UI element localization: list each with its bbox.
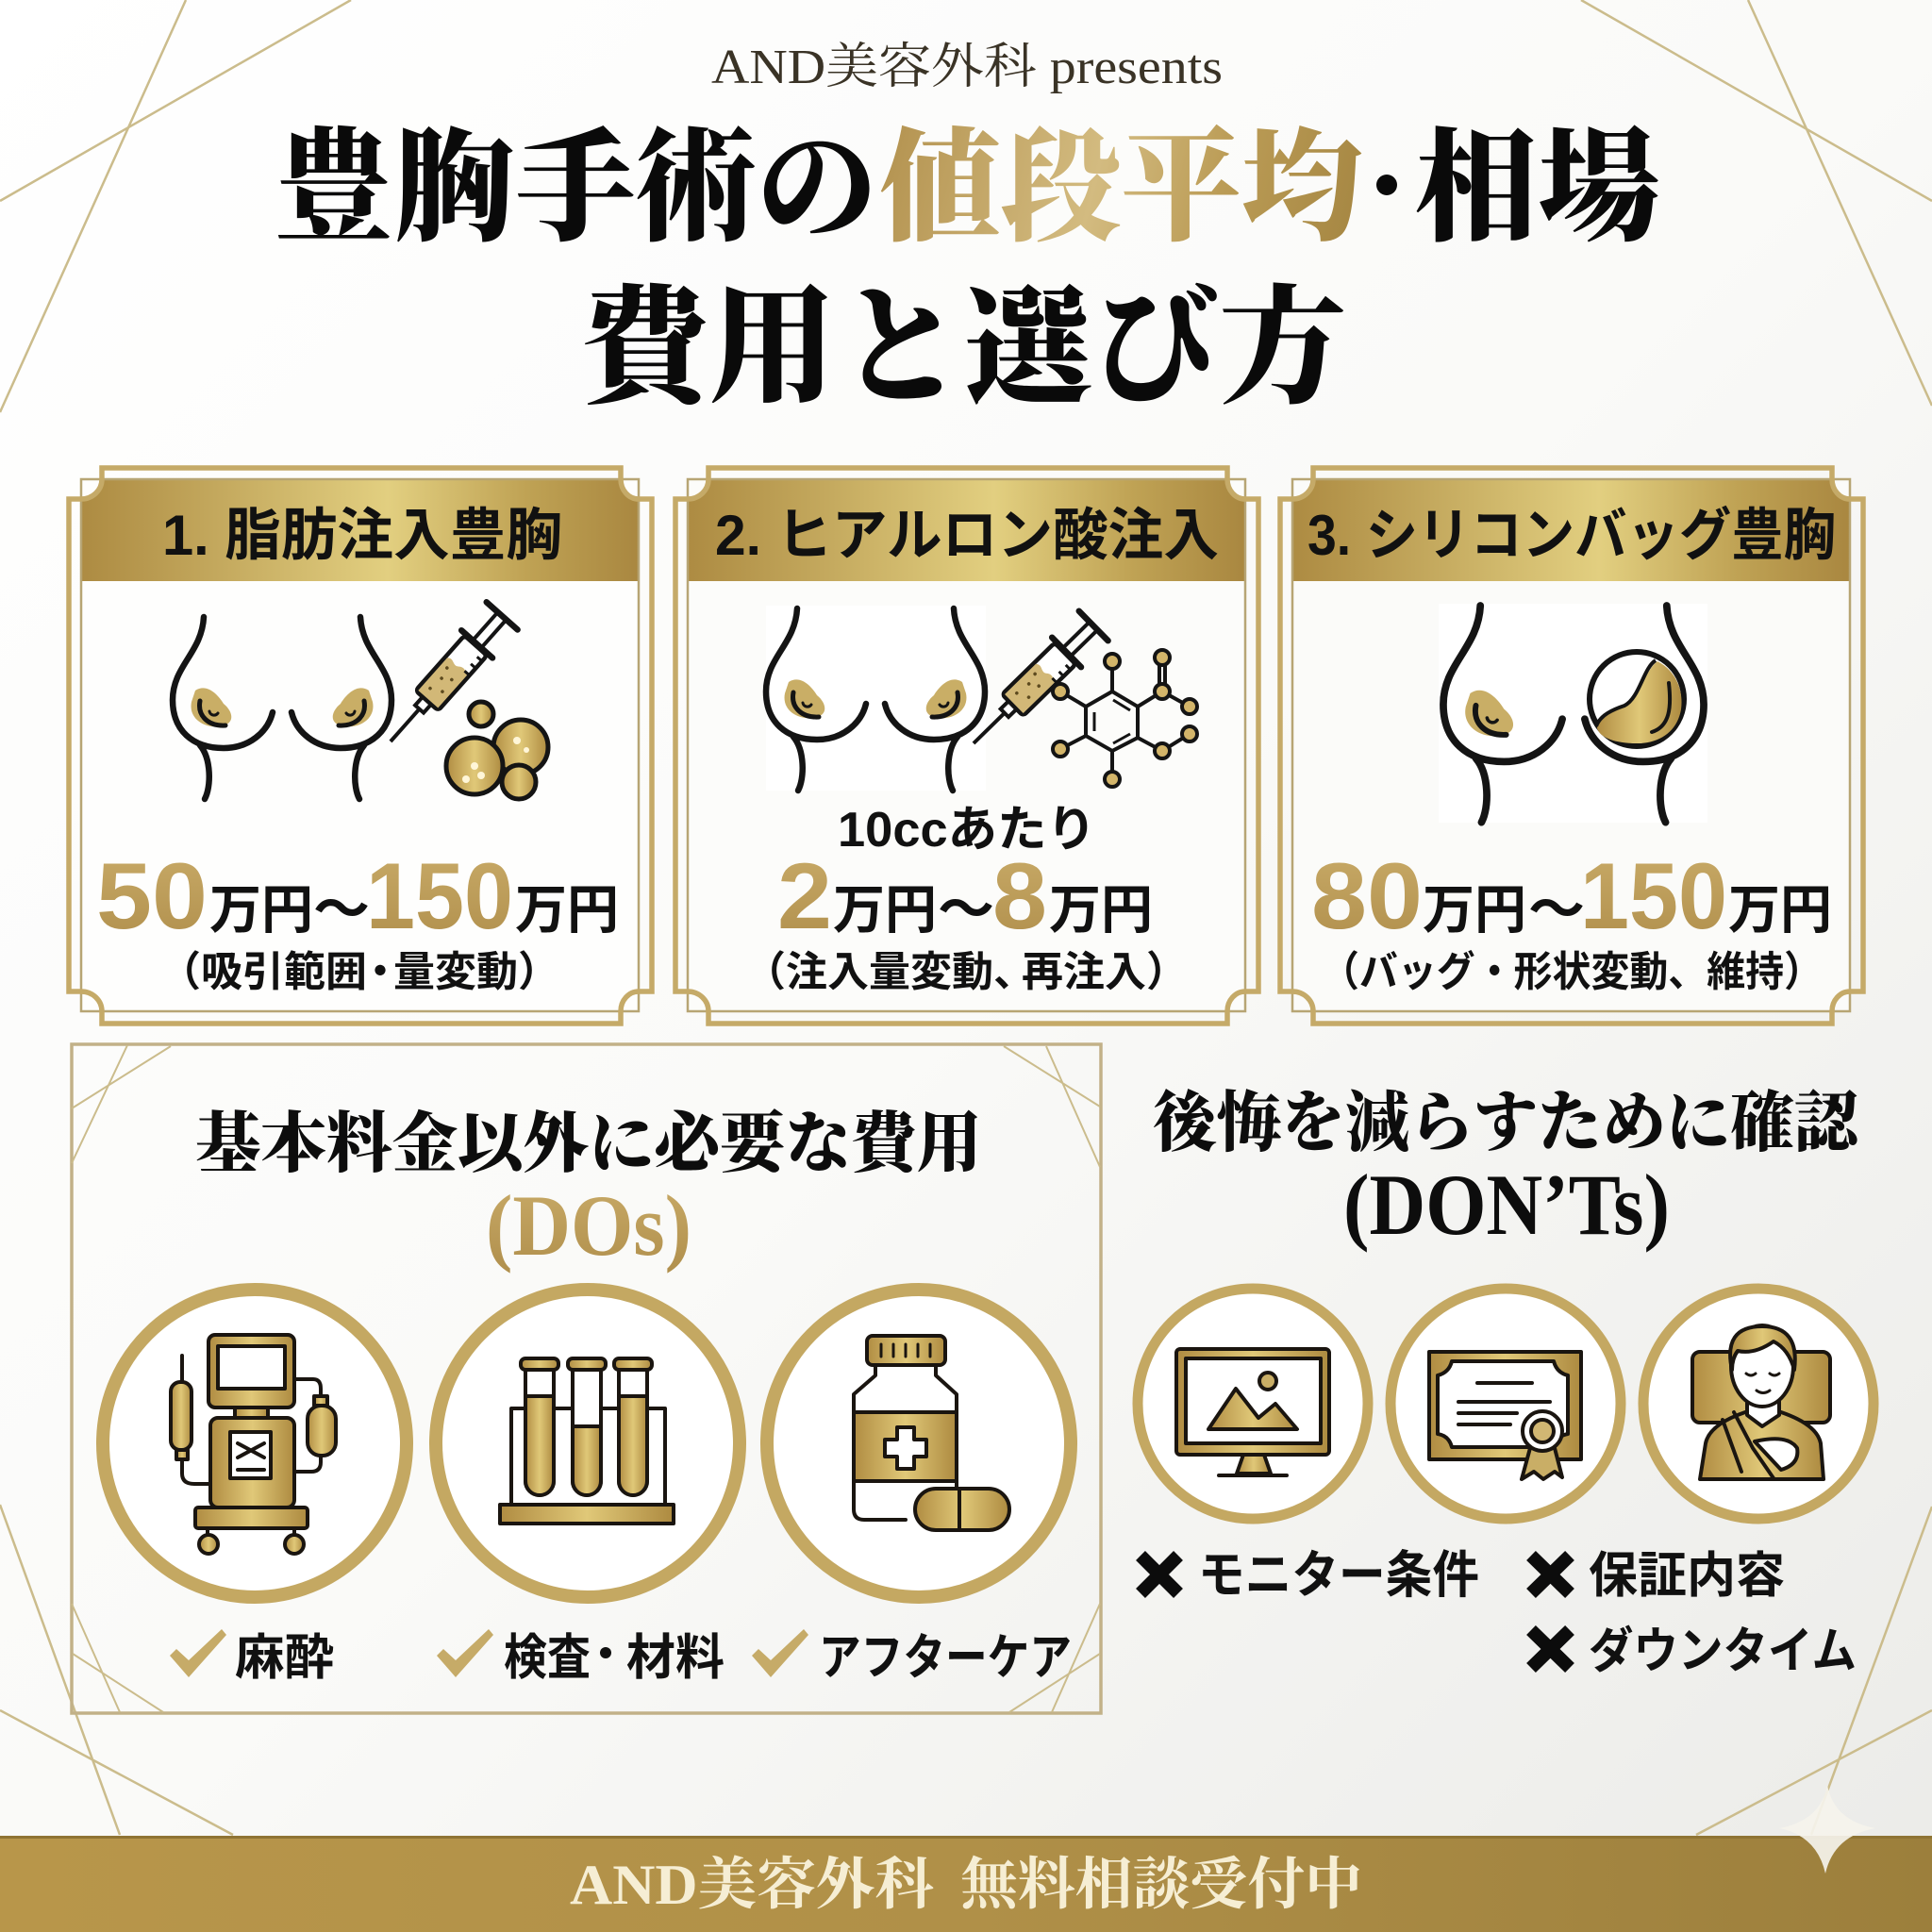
price: card 2 [777,843,1153,948]
note: card 2: （注入量変動、再注入） [744,949,1188,995]
heading: card 3: 3. シリコンバッグ豊胸 [1307,504,1836,567]
label: guarantee details: 保証内容 [1589,1549,1785,1604]
price: card 2: 2 [777,843,832,948]
price: card 2: ～ [938,879,994,941]
icon: certificate [1391,1289,1621,1519]
icon: torso 2 [766,608,985,791]
label: tests and materials: 検査 [504,1631,591,1686]
price: card 2: 万円 [833,880,937,940]
panel: DOs [72,1044,1101,1713]
icon: sparkle [1779,1785,1875,1874]
price: card 1: 万円 [209,880,313,940]
price: card 3: ～ [1528,879,1585,941]
icon: patient resting [1643,1289,1874,1519]
icon: torso 1 [173,617,391,799]
panel: 2 hyaluronic acid [675,468,1258,1024]
icon: test tubes [436,1290,740,1597]
title: 費用と選び方 [581,279,1347,421]
label: aftercare [752,1629,1072,1686]
price: card 2: 8 [992,843,1047,948]
title [274,122,1660,421]
panel: DON'Ts [1138,1088,1874,1679]
icon: implant [1590,652,1684,746]
label: aftercare: アフターケア [819,1631,1072,1686]
heading: card 2: 2. ヒアルロン酸注入 [715,504,1219,567]
icon: molecule [1053,650,1197,787]
heading: card 1: 1. 脂肪注入豊胸 [162,504,562,567]
price: card 1: 50 [96,843,208,948]
title: 豊胸手術の [274,122,877,258]
panel: 1 fat injection [69,468,652,1024]
note: card 3: （バッグ・形状変動、維持） [1321,949,1823,995]
subheading: DOs: (DOs) [486,1177,691,1274]
price: card 3: 万円 [1423,880,1526,940]
footer band [0,1836,1932,1932]
footer text: 無料相談受付中 [960,1854,1362,1916]
text: per 10cc: 10ccあたり [838,803,1096,858]
price: card 3: 80 [1311,843,1423,948]
price: card 3: 150 [1580,843,1727,948]
footer text [570,1854,1362,1916]
footer text: AND美容外科 [570,1854,934,1916]
icon: monitor [1138,1289,1368,1519]
label: tests and materials [437,1629,724,1686]
label: tests and materials: 材料 [626,1631,724,1686]
heading: DON'Ts: 後悔を減らすために確認 [1153,1088,1865,1160]
heading: DOs: 基本料金以外に必要な費用 [195,1108,982,1181]
subheading: DON'Ts: (DON’Ts) [1343,1157,1670,1253]
icon: medicine bottle [767,1290,1071,1597]
header: presenter: AND美容外科 presents [711,41,1223,94]
label: monitor conditions: モニター条件 [1198,1547,1479,1604]
price: card 3 [1311,843,1832,948]
title: 相場 [1415,122,1660,258]
icon: syringe 1 [375,602,518,756]
label: downtime: ダウンタイム [1589,1624,1857,1679]
icon: fat cells [446,702,548,799]
icon: syringe 2 [959,611,1108,758]
title: 値段平均 [879,122,1362,258]
icon: anesthesia machine [103,1290,407,1597]
note: card 1: （吸引範囲・量変動） [159,949,559,995]
price: card 3: 万円 [1728,880,1832,940]
price: card 1: 150 [366,843,513,948]
label: anesthesia [170,1629,334,1686]
icon: torso 3 [1443,606,1704,823]
panel: 3 silicone implant [1280,468,1863,1024]
price: card 1: 万円 [515,880,619,940]
price: card 2: 万円 [1049,880,1153,940]
price: card 1 [96,843,619,948]
label: anesthesia: 麻酔 [235,1631,334,1686]
price: card 1: ～ [313,879,370,941]
